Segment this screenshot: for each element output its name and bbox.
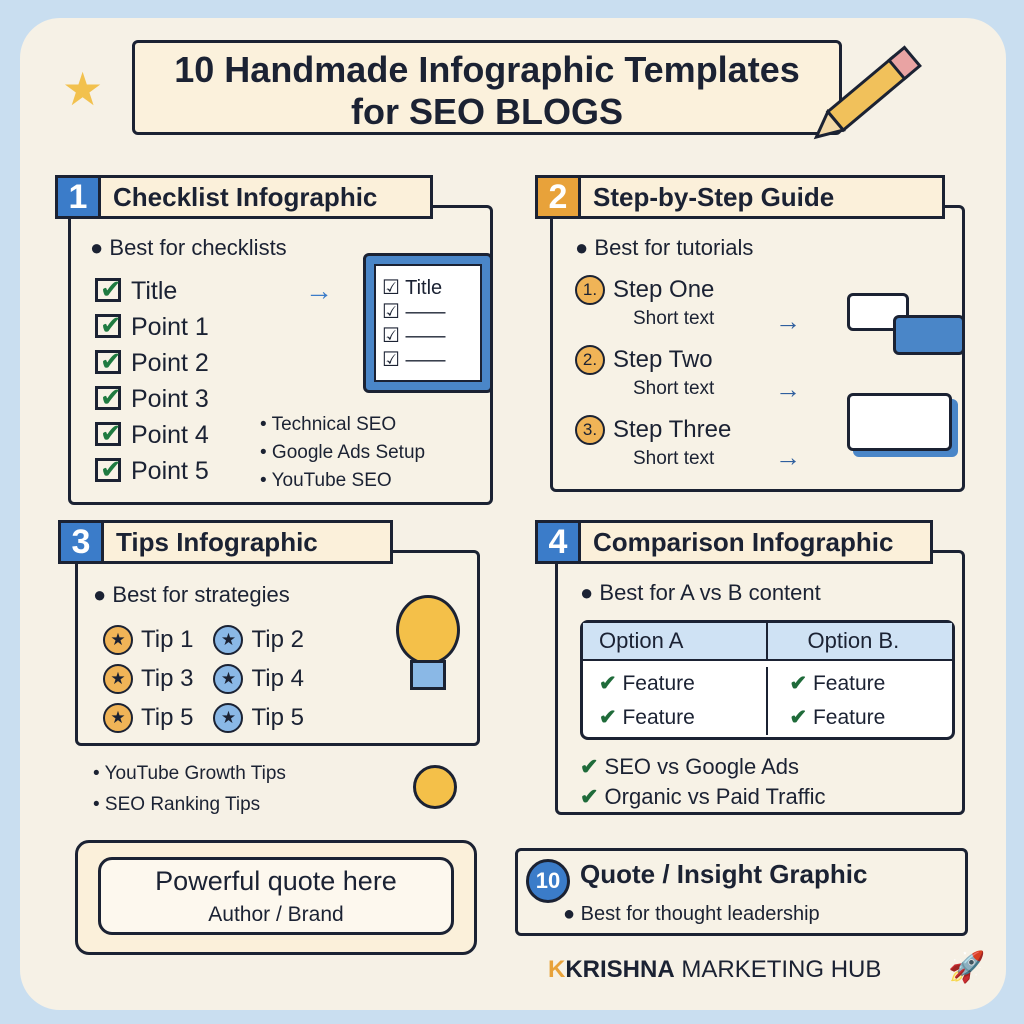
quote box (75, 840, 477, 955)
text block: ● Best for A vs B content (580, 580, 821, 605)
text block: ● Best for strategies (93, 582, 290, 607)
arrows: → (775, 306, 801, 336)
examples: • Google Ads Setup (260, 442, 425, 463)
steps: Step One (613, 276, 714, 303)
icon: pencil (814, 45, 922, 140)
tips grid: ★ (221, 708, 236, 727)
steps (575, 275, 731, 469)
comparison table: ✔ Feature (599, 672, 695, 695)
heading: 3 (72, 522, 90, 560)
examples: • SEO Ranking Tips (93, 794, 260, 815)
examples (260, 414, 425, 491)
heading: Checklist Infographic (113, 182, 377, 212)
quote box: Author / Brand (208, 903, 344, 926)
tips grid: ★ (221, 630, 236, 649)
steps: Step Three (613, 416, 731, 443)
steps: 1. (583, 280, 597, 299)
icon: small bulb (413, 765, 457, 809)
checklist: Point 2 (131, 349, 209, 377)
examples: ✔ Organic vs Paid Traffic (580, 784, 825, 809)
examples (580, 754, 825, 809)
badge (526, 859, 570, 903)
examples: ✔ SEO vs Google Ads (580, 754, 799, 779)
comparison table: Option A (599, 628, 683, 653)
checklist: Point 4 (131, 421, 209, 449)
icon: clipboard: ☑ Title (382, 277, 442, 299)
panel: 3 tips (58, 520, 480, 815)
quote box: Powerful quote here (155, 866, 397, 896)
panel: 2 step by step (535, 175, 965, 492)
tips grid: ★ (110, 630, 126, 649)
comparison table: Option B. (808, 628, 899, 653)
examples: • YouTube SEO (260, 470, 392, 491)
arrows: → (775, 442, 801, 472)
arrows: → (775, 374, 801, 404)
footer brand: KKRISHNA MARKETING HUB (548, 956, 881, 983)
checklist: Point 1 (131, 313, 209, 341)
title: for SEO BLOGS (351, 91, 623, 132)
heading: Step-by-Step Guide (593, 182, 834, 212)
icon: clipboard: ☑ —— (382, 349, 446, 371)
heading (55, 175, 433, 219)
heading (535, 175, 945, 219)
steps: Short text (633, 448, 714, 469)
tips grid: Tip 3 Tip 4 (141, 665, 304, 692)
arrows (775, 306, 801, 472)
heading: Comparison Infographic (593, 526, 893, 556)
arrow: → (305, 275, 333, 306)
title: 10 Handmade Infographic Templates (174, 49, 800, 90)
checklist (95, 277, 209, 485)
tips grid: ★ (110, 669, 126, 688)
steps: Short text (633, 378, 714, 399)
steps: Short text (633, 308, 714, 329)
panel: 1 checklist (55, 175, 493, 505)
text block: ● Best for checklists (90, 235, 287, 260)
title (132, 40, 842, 135)
steps: 3. (583, 420, 597, 439)
tips grid: Tip 5 Tip 5 (141, 704, 304, 731)
comparison table (580, 620, 955, 740)
tips grid: ★ (110, 708, 126, 727)
heading: 1 (69, 178, 87, 216)
tips grid: ★ (221, 669, 236, 688)
heading: Quote / Insight Graphic (580, 859, 867, 889)
text block: ● Best for thought leadership (563, 903, 820, 925)
icon: clipboard (363, 253, 493, 393)
checklist: Point 3 (131, 385, 209, 413)
icon: speech bubbles (847, 293, 909, 331)
heading: 2 (549, 178, 567, 216)
checklist: Point 5 (131, 457, 209, 485)
examples: • YouTube Growth Tips (93, 763, 286, 784)
text block: ● Best for tutorials (575, 235, 753, 260)
tips grid (103, 625, 304, 733)
tips grid: Tip 1 Tip 2 (141, 626, 304, 653)
icon: lightbulb (396, 595, 460, 665)
icon: clipboard: ☑ —— (382, 325, 446, 347)
icon: star: ★ (62, 63, 103, 115)
comparison table: ✔ Feature (790, 706, 885, 729)
steps: Step Two (613, 346, 713, 373)
heading (535, 520, 933, 564)
heading: Tips Infographic (116, 526, 318, 556)
heading (58, 520, 393, 564)
comparison table: ✔ Feature (790, 672, 885, 695)
examples (93, 763, 286, 815)
comparison table: ✔ Feature (599, 706, 695, 729)
heading: 4 (549, 522, 567, 560)
icon: clipboard: ☑ —— (382, 301, 446, 323)
examples: • Technical SEO (260, 414, 396, 435)
icon: rocket: 🚀 (948, 951, 985, 984)
panel: 10 quote insight (515, 848, 968, 936)
panel: 4 comparison (535, 520, 965, 815)
checklist: Title (131, 277, 177, 305)
steps: 2. (583, 350, 597, 369)
badge: 10 (536, 868, 560, 893)
